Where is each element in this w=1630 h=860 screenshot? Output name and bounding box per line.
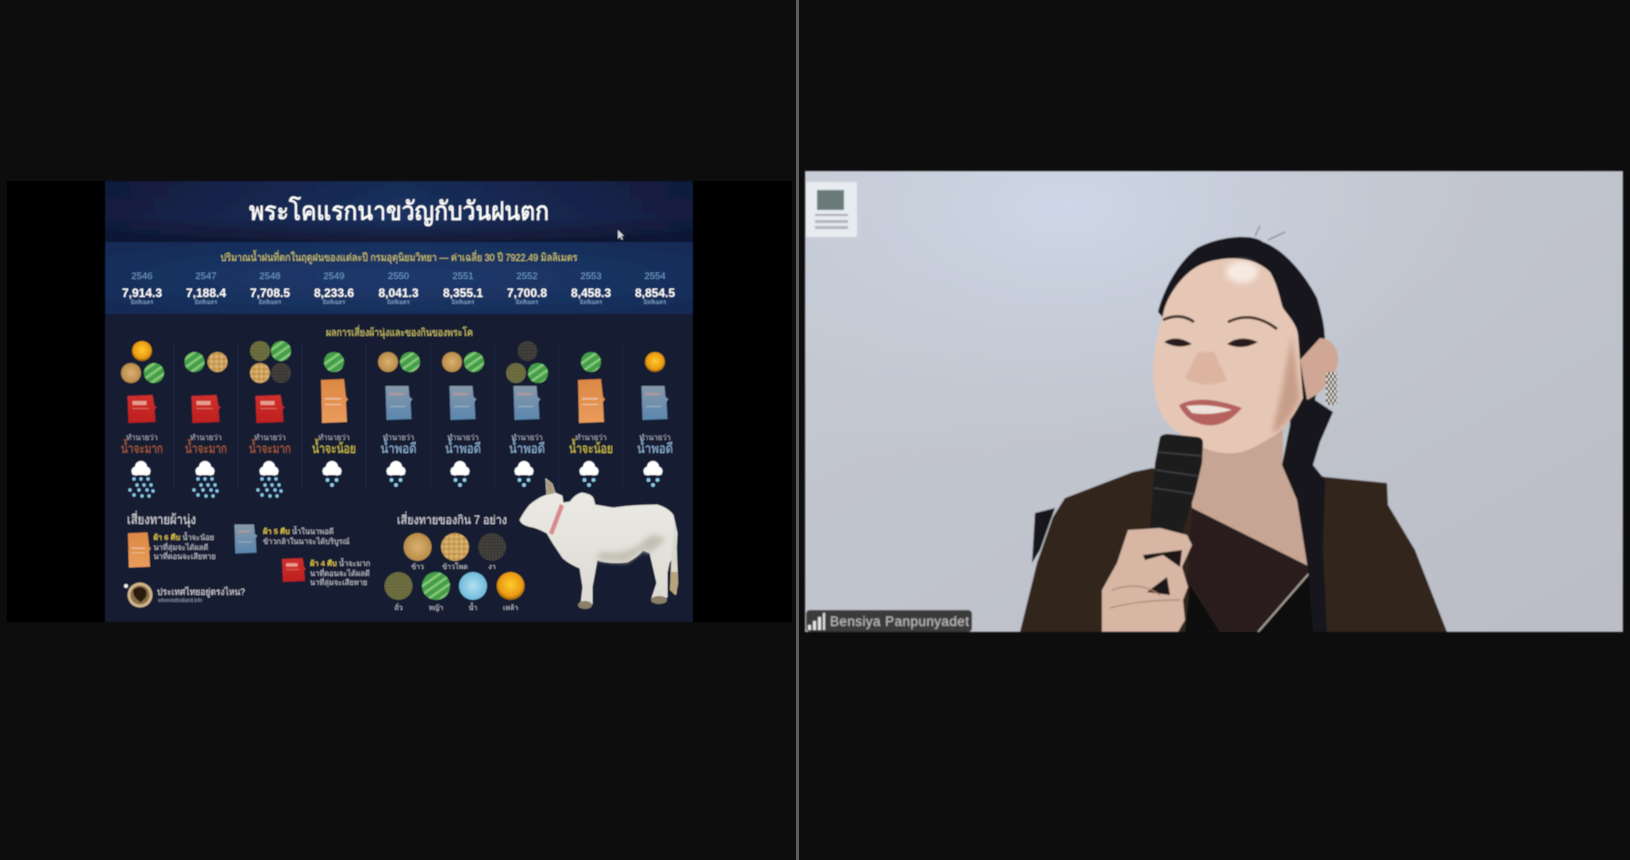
- stray hair: [1255, 226, 1285, 240]
- rainfall 2553: 8,458.3: [571, 286, 611, 300]
- rainfall 2549: 2549: [323, 271, 345, 282]
- rainfall 2546: มิลลิเมตร: [130, 299, 153, 306]
- collar: [1186, 508, 1312, 632]
- red cloth legend: ผ้า 4 คืบ น้ำจะมาก: [310, 558, 370, 568]
- column 2554 prediction: [637, 352, 673, 487]
- orange cloth legend: [128, 532, 216, 568]
- column 2550 prediction: ทำนายว่า: [383, 433, 414, 442]
- column 2550 prediction: น้ำพอดี: [380, 438, 416, 456]
- column 2548 prediction: น้ำจะมาก: [249, 438, 291, 456]
- food: sesame: งา: [488, 564, 496, 571]
- column 2549 prediction: [312, 352, 356, 487]
- title: พระโคแรกนาขวัญกับวันฝนตก: [249, 196, 549, 226]
- rainfall 2548: 7,708.5: [250, 286, 290, 300]
- wall: [805, 171, 1623, 632]
- wall thermostat: [806, 182, 857, 237]
- brand caption: [157, 586, 245, 604]
- food: liquor: [497, 572, 525, 612]
- rainfall 2549: 8,233.6: [314, 286, 354, 300]
- rainfall 2554: 8,854.5: [635, 286, 675, 300]
- column 2546 prediction: [121, 341, 164, 498]
- column 2550 prediction: [378, 352, 420, 487]
- column 2552 prediction: น้ำพอดี: [509, 438, 545, 456]
- column 2547 prediction: น้ำจะมาก: [185, 438, 227, 456]
- rainfall 2547: [186, 271, 226, 306]
- ox shading: [597, 535, 665, 562]
- earring: [1326, 372, 1337, 405]
- food: water: [459, 572, 487, 612]
- blue cloth legend: ข้าวกล้าในนาจะได้บริบูรณ์: [263, 537, 350, 546]
- orange cloth legend: นาที่ลุ่มจะได้ผลดี: [154, 542, 208, 552]
- jacket: [1020, 468, 1447, 632]
- hand: [1102, 528, 1192, 632]
- hair and ponytail: [1158, 237, 1333, 632]
- panel: shared slide frame: [7, 181, 792, 622]
- right eye: [1227, 338, 1258, 347]
- inner black top left: [1185, 585, 1220, 632]
- rainfall 2550: [378, 271, 419, 306]
- ox collar: [549, 504, 564, 535]
- rainfall 2552: 2552: [516, 271, 538, 282]
- zipper: [1258, 570, 1312, 632]
- rainfall 2547: มิลลิเมตร: [194, 299, 217, 306]
- rainfall 2551: 8,355.1: [443, 286, 483, 300]
- food: liquor: เหล้า: [503, 604, 518, 612]
- orange cloth legend: นาที่ดอนจะเสียหาย: [154, 551, 216, 561]
- inner black top right: [1258, 570, 1320, 632]
- rainfall 2554: มิลลิเมตร: [643, 299, 666, 306]
- column 2553 prediction: น้ำจะน้อย: [569, 438, 613, 456]
- teeth: [1186, 405, 1232, 414]
- rainfall 2550: มิลลิเมตร: [387, 299, 410, 306]
- food: beans: ถั่ว: [394, 603, 403, 612]
- red cloth legend: นาที่ดอนจะได้ผลดี: [310, 568, 370, 578]
- red cloth legend: นาที่ลุ่มจะเสียหาย: [310, 577, 367, 587]
- food: sesame: [478, 533, 506, 571]
- ear: [1300, 338, 1338, 400]
- center divider: [796, 0, 799, 860]
- slide background: [105, 181, 693, 622]
- microphone: [1150, 434, 1203, 565]
- rainfall 2546: 7,914.3: [122, 286, 162, 300]
- orange cloth legend: ผ้า 6 คืบ น้ำจะน้อย: [154, 532, 214, 542]
- rainfall 2546: 2546: [131, 271, 153, 282]
- column 2551 prediction: น้ำพอดี: [445, 438, 481, 456]
- rainfall 2553: 2553: [580, 271, 602, 282]
- rainfall 2548: [250, 271, 290, 306]
- neck: [1190, 430, 1312, 568]
- blue cloth legend: [234, 525, 350, 553]
- rainfall 2552: [507, 271, 547, 306]
- left brow: [1163, 316, 1194, 322]
- column 2554 prediction: น้ำพอดี: [637, 438, 673, 456]
- column 2552 prediction: [506, 341, 548, 487]
- column 2547 prediction: [184, 352, 228, 498]
- ox tail: [670, 520, 678, 595]
- ox hooves: [578, 601, 592, 609]
- rainfall 2554: 2554: [644, 271, 666, 282]
- food: grass: [422, 572, 450, 612]
- rainfall 2551: มิลลิเมตร: [451, 299, 474, 306]
- food legend heading: เสี่ยงทายของกิน 7 อย่าง: [397, 511, 507, 527]
- cloth legend heading: เสี่ยงทายผ้านุ่ง: [127, 511, 196, 528]
- chair: [1032, 508, 1055, 563]
- finger gap: [1147, 577, 1170, 595]
- rainfall subtitle: ปริมาณน้ำฝนที่ตกในฤดูฝนของแต่ละปี กรมอุตุนิยมวิทยา — ค่าเฉลี่ย 30 ปี 7922.49 มิลลิเมตร: [220, 250, 578, 264]
- band background: [105, 242, 693, 314]
- rainfall 2547: 2547: [195, 271, 217, 282]
- column 2547 prediction: ทำนายว่า: [190, 433, 222, 442]
- panel: cloth legend: [127, 511, 370, 587]
- name tag: [806, 610, 972, 632]
- column 2548 prediction: ทำนายว่า: [254, 433, 286, 442]
- person: [1020, 226, 1447, 632]
- rainfall 2554: [635, 271, 675, 306]
- rainfall 2552: 7,700.8: [507, 286, 547, 300]
- mouse cursor: [618, 230, 624, 240]
- mic grip in hand: [1143, 550, 1182, 567]
- right brow: [1228, 317, 1277, 329]
- column 2546 prediction: น้ำจะมาก: [121, 438, 163, 456]
- panel: rainfall band: [105, 242, 693, 314]
- food: corn: ข้าวโพด: [442, 562, 468, 571]
- face: [1153, 258, 1303, 453]
- mouth: [1179, 400, 1242, 425]
- column 2549 prediction: ทำนายว่า: [318, 433, 350, 442]
- rainfall 2549: มิลลิเมตร: [322, 299, 345, 306]
- cheek shadow: [1272, 335, 1300, 434]
- food: beans: [384, 572, 412, 612]
- rainfall 2549: [314, 271, 354, 306]
- rainfall 2546: [122, 271, 162, 306]
- column 2546 prediction: ทำนายว่า: [126, 433, 158, 442]
- column 2552 prediction: ทำนายว่า: [511, 433, 543, 442]
- rainfall 2548: 2548: [259, 271, 281, 282]
- column 2548 prediction: [249, 341, 291, 498]
- rainfall 2547: 7,188.4: [186, 286, 226, 300]
- food: rice: ข้าว: [411, 563, 424, 571]
- participant name: Bensiya Panpunyadet: [830, 614, 969, 629]
- column 2554 prediction: ทำนายว่า: [639, 433, 671, 442]
- illustration: white ox: [520, 479, 678, 609]
- blue cloth legend: ผ้า 5 คืบ น้ำในนาพอดี: [263, 526, 334, 536]
- food: water: น้ำ: [469, 601, 477, 612]
- column 2551 prediction: [442, 352, 484, 487]
- forehead highlight: [1226, 261, 1258, 283]
- logo: coffee cup: [124, 582, 152, 608]
- column 2553 prediction: [569, 352, 613, 487]
- mic ridges: [1154, 452, 1202, 494]
- rainfall 2552: มิลลิเมตร: [515, 299, 538, 306]
- ox horn: [546, 479, 555, 495]
- red cloth legend: [282, 558, 370, 587]
- rainfall 2550: 2550: [388, 271, 409, 282]
- nose: [1185, 352, 1227, 385]
- panel: infographic slide: [105, 181, 693, 622]
- panel: webcam video: [805, 171, 1623, 632]
- finger lines: [1110, 586, 1180, 608]
- rainfall 2553: [571, 271, 611, 306]
- brand caption: ประเทศไทยอยู่ตรงไหน?: [157, 586, 245, 598]
- food: rice: [404, 533, 432, 571]
- column 2551 prediction: ทำนายว่า: [447, 433, 479, 442]
- rainfall 2553: มิลลิเมตร: [579, 299, 602, 306]
- brand caption: whereisthailand.info: [158, 598, 202, 604]
- results heading: ผลการเสี่ยงผ้านุ่งและของกินของพระโค: [326, 325, 473, 339]
- rainfall 2548: มิลลิเมตร: [258, 299, 281, 306]
- title banner: [105, 181, 693, 242]
- signal bars icon: [808, 613, 825, 630]
- panel: food legend: [384, 511, 525, 612]
- rainfall 2550: 8,041.3: [378, 286, 419, 300]
- rainfall 2551: [443, 271, 483, 306]
- column 2553 prediction: ทำนายว่า: [575, 433, 607, 442]
- food: grass: หญ้า: [429, 604, 443, 612]
- food: corn: [441, 533, 469, 571]
- left eye: [1164, 338, 1192, 347]
- rainfall 2551: 2551: [452, 271, 474, 282]
- column 2549 prediction: น้ำจะน้อย: [312, 438, 356, 456]
